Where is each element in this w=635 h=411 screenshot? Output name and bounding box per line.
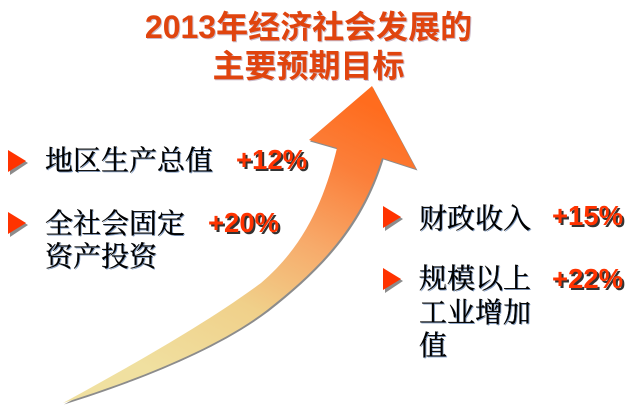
label: GDP: 地区生产总值 [45,146,213,177]
label: industrial value added: 规模以上 [419,264,531,295]
label: fixed assets [45,209,185,273]
label: industrial value added: 工业增加 [419,298,531,328]
label: industrial value added: 值 [419,331,447,362]
title: 2013年经济社会发展的 [145,9,472,45]
bullet: industrial value added [383,268,403,293]
title: 主要预期目标 [212,48,404,84]
value: industrial value added: +22% [552,263,623,294]
value: fixed assets: +20% [208,207,279,238]
value: fiscal revenue: +15% [552,200,623,231]
bullet: fixed assets [8,212,28,237]
label: fixed assets: 全社会固定 [45,209,185,240]
bullet: fiscal revenue [383,206,403,231]
value: GDP: +12% [236,144,307,175]
label: fixed assets: 资产投资 [45,242,157,273]
title [145,9,472,84]
bullet: GDP [8,150,28,175]
label: fiscal revenue: 财政收入 [419,204,531,235]
label: industrial value added [419,264,531,362]
